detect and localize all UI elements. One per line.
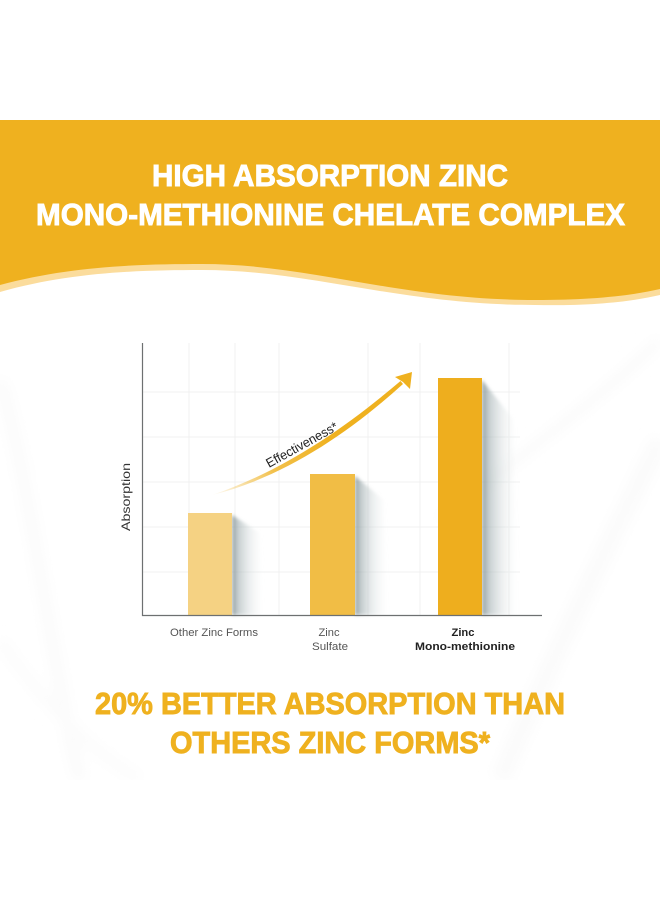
x axis labels: Sulfate [312, 641, 348, 653]
arrow: effectiveness [212, 372, 412, 495]
axes [142, 343, 542, 616]
arrow label: Effectiveness* [263, 419, 340, 471]
callout [95, 686, 565, 760]
bar chart: Mono-methionine [415, 641, 515, 653]
x axis labels: Zinc [318, 627, 340, 639]
bar chart: Zinc [452, 627, 474, 639]
callout: 20% BETTER ABSORPTION THAN [95, 686, 565, 721]
bar: other zinc forms [188, 513, 232, 615]
x axis labels: Other Zinc Forms [170, 627, 259, 639]
bar chart [119, 343, 542, 653]
bar: zinc sulfate [310, 474, 355, 615]
bottom margin [0, 780, 660, 900]
x axis labels [170, 627, 348, 653]
title [36, 158, 625, 232]
yellow band [0, 120, 660, 300]
header band [0, 120, 660, 305]
grid lines [143, 343, 520, 615]
title: HIGH ABSORPTION ZINC [152, 158, 508, 193]
y axis label: Absorption [119, 463, 133, 531]
silk background [0, 340, 660, 780]
bar shadows [232, 380, 518, 615]
wave highlight [0, 120, 660, 305]
callout: OTHERS ZINC FORMS* [170, 725, 491, 760]
title: MONO-METHIONINE CHELATE COMPLEX [36, 197, 625, 232]
bar: zinc mono-methionine [438, 378, 482, 615]
